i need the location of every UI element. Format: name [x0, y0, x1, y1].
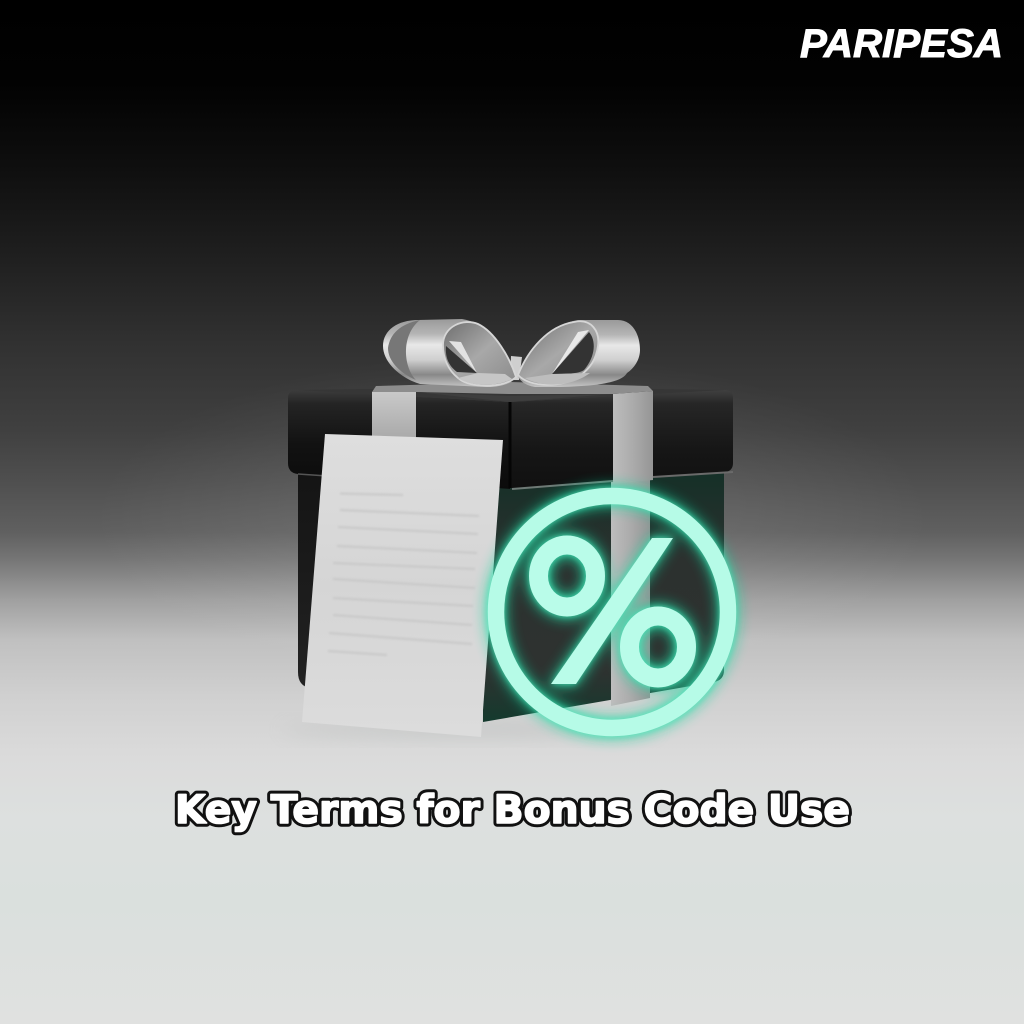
right loop [518, 320, 640, 387]
left loop [383, 319, 516, 387]
neon percent badge [496, 496, 728, 728]
title: Key Terms for Bonus Code Use [175, 788, 850, 833]
glow layer [496, 496, 728, 728]
ring [496, 496, 728, 728]
percent sign [538, 538, 686, 684]
inner glow layer [496, 496, 728, 728]
box lid [288, 382, 733, 489]
logo: Paripesa: PARIPESA [800, 22, 1003, 66]
floor shadow [280, 724, 660, 736]
box body [298, 470, 724, 722]
document sheet [302, 434, 503, 737]
text lines on sheet [328, 494, 479, 655]
gift box illustration [288, 319, 733, 722]
title: Key Terms for Bonus Code Use [175, 788, 850, 833]
silver bow [383, 319, 640, 387]
